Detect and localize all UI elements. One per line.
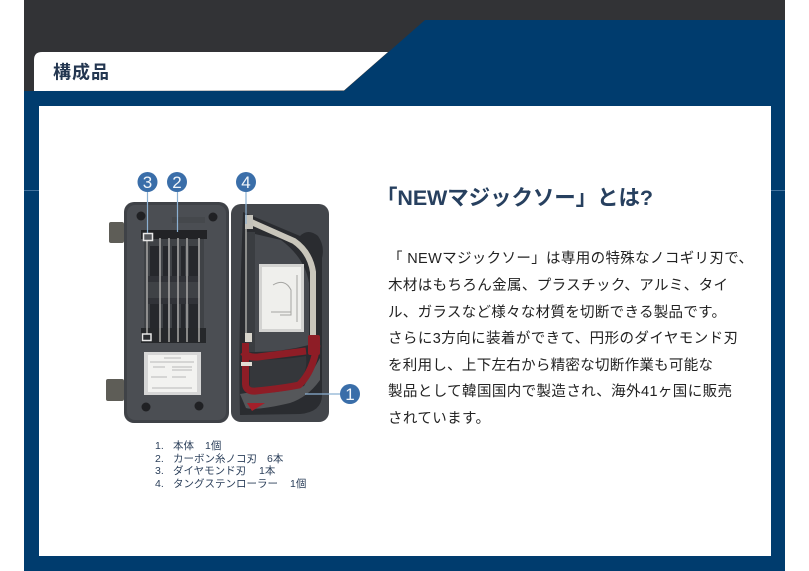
list item 3: ダイヤモンド刃 — [173, 464, 246, 477]
marker — [167, 172, 187, 192]
line 7: されています。 — [388, 410, 490, 427]
clip top — [144, 234, 152, 240]
white content panel — [39, 106, 771, 556]
saw frame — [249, 221, 313, 336]
blade holder — [141, 230, 207, 343]
card — [259, 264, 304, 332]
dark header band — [24, 0, 785, 92]
handle tip — [247, 403, 265, 411]
line 4: さらに3方向に装着ができて、円形のダイヤモンド刃 — [388, 330, 738, 347]
callout 1 — [340, 384, 360, 404]
case left half — [124, 202, 229, 423]
list item 4: タングステンローラー — [173, 477, 278, 490]
left band tick — [24, 190, 39, 191]
recess island — [255, 234, 309, 352]
marker number: 2 — [172, 173, 182, 192]
marker number: 1 — [345, 385, 355, 404]
callout lines — [148, 190, 342, 394]
clip bottom — [142, 334, 151, 340]
card — [144, 352, 201, 395]
lower clamp — [245, 333, 252, 342]
marker number: 3 — [143, 173, 152, 192]
left shell — [124, 202, 229, 423]
holder slots — [150, 246, 198, 328]
holder top bar — [141, 230, 207, 239]
list item 2: 2. — [155, 453, 164, 465]
instruction card left — [144, 352, 201, 395]
callout 2 — [167, 172, 187, 192]
line 2: 木材はもちろん金属、プラスチック、アルミ、タイ — [388, 277, 728, 294]
list item 1: 1. — [155, 440, 164, 452]
card diagram — [271, 275, 297, 322]
tab shape — [34, 52, 388, 91]
heading: components: 構成品 — [53, 62, 109, 82]
handle grip — [240, 358, 320, 409]
list item 3: 1本 — [259, 464, 276, 477]
line 5: を利用し、上下左右から精密な切断作業も可能な — [388, 357, 713, 374]
marker number: 4 — [241, 173, 251, 192]
list item 1: 1個 — [205, 439, 221, 452]
list item 2: カーボン糸ノコ刃 — [173, 452, 257, 465]
holder mid band — [148, 276, 200, 304]
list item 4: 1個 — [290, 477, 306, 490]
right shell — [231, 204, 329, 422]
card text lines — [150, 358, 194, 388]
card inner — [262, 267, 301, 329]
saw blade — [245, 226, 247, 336]
left shell inner — [127, 205, 226, 420]
holder bottom bar — [141, 328, 206, 343]
handle block — [308, 335, 320, 355]
screw bottom right — [194, 402, 204, 410]
instruction card right — [259, 264, 304, 332]
latch bottom — [106, 379, 124, 401]
screw top right — [208, 212, 218, 222]
right band tick — [771, 190, 785, 191]
heading tab — [34, 52, 388, 91]
frame clamp — [245, 215, 253, 229]
card inner — [148, 355, 197, 392]
component list — [155, 439, 306, 490]
screw top left — [136, 212, 146, 220]
handle fitting — [241, 362, 252, 366]
product photo: open saw case — [106, 172, 360, 423]
list item 2: 6本 — [267, 452, 284, 465]
logo emboss — [172, 217, 205, 223]
marker — [138, 172, 158, 192]
line 6: 製品として韓国国内で製造され、海外41ヶ国に販売 — [388, 383, 732, 400]
case right half — [231, 204, 329, 422]
line 3: ル、ガラスなど様々な材質を切断できる製品です。 — [388, 303, 726, 321]
marker — [236, 172, 256, 192]
recess — [239, 212, 323, 415]
list item 3: 3. — [155, 465, 164, 477]
list item 4: 4. — [155, 478, 164, 490]
description text — [388, 250, 753, 427]
handle hole — [250, 356, 306, 388]
callout 4 — [236, 172, 256, 192]
saw handle — [243, 343, 317, 391]
marker — [340, 384, 360, 404]
screw bottom left — [142, 402, 150, 412]
list item 1: 本体 — [173, 439, 194, 452]
latch top — [109, 222, 124, 243]
line 1: 「 NEWマジックソー」は専用の特殊なノコギリ刃で、 — [388, 250, 753, 267]
channel fill — [246, 232, 255, 352]
holder body — [144, 238, 204, 330]
callout 3 — [138, 172, 158, 192]
section heading: 「NEWマジックソー」とは? — [376, 186, 653, 210]
blades — [147, 238, 199, 342]
